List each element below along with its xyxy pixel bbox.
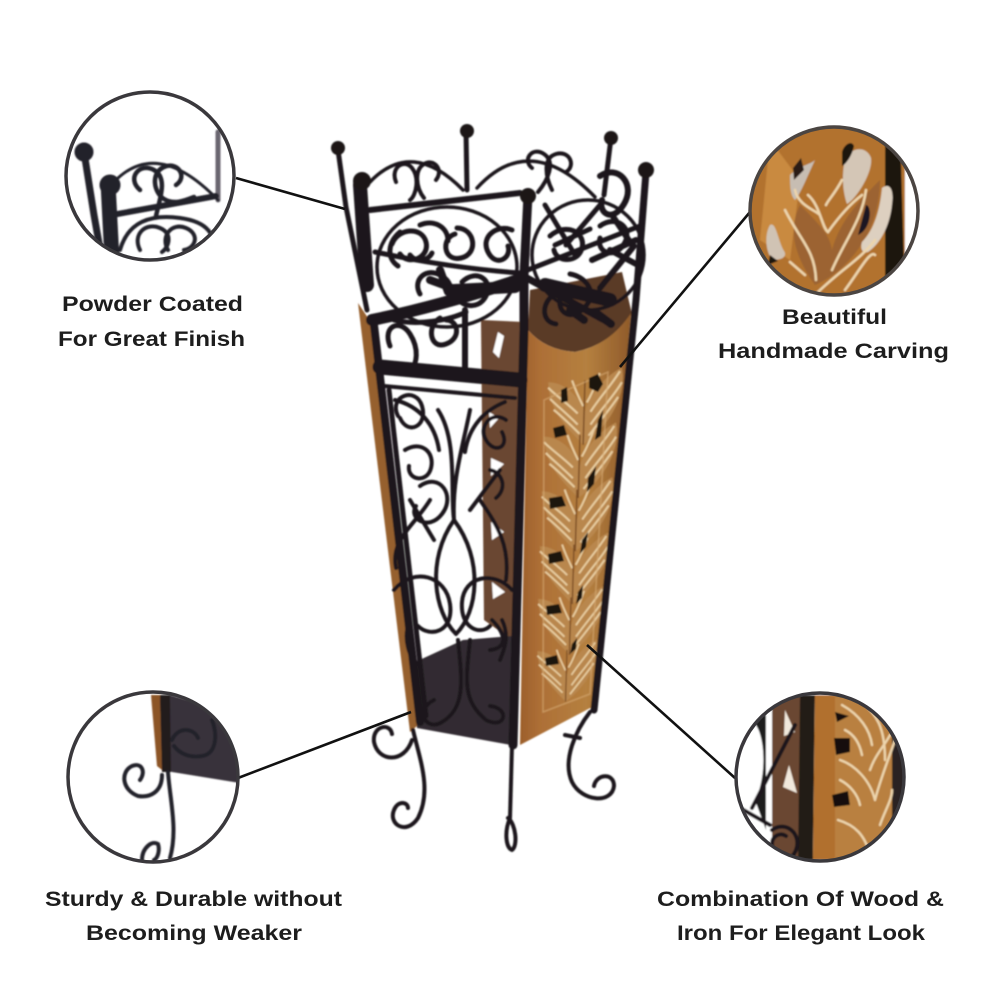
callout top-left: iron scroll detail <box>66 92 234 260</box>
label: handmade carving: Handmade Carving <box>718 340 949 363</box>
back panel cut-outs <box>489 332 505 599</box>
label: wood and iron: Combination Of Wood & <box>657 888 944 911</box>
label: sturdy and durable: Sturdy & Durable without <box>45 888 342 911</box>
back brown panel <box>481 320 524 640</box>
left wood side panel <box>358 303 424 732</box>
right carved wood panel <box>520 313 631 745</box>
finial balls <box>331 124 654 204</box>
corner posts <box>338 150 367 310</box>
connector lines <box>236 178 750 778</box>
label: handmade carving: Beautiful <box>782 306 887 329</box>
base plate <box>413 636 512 745</box>
iron frame <box>338 132 646 850</box>
door frame <box>380 367 520 380</box>
rim bars <box>370 193 520 210</box>
label: powder coated: Powder Coated <box>62 293 243 316</box>
feet <box>374 727 424 827</box>
callout top-right: wood carving detail <box>745 120 925 300</box>
rim rear wood glimpse <box>528 272 632 352</box>
label: powder coated: For Great Finish <box>58 328 245 351</box>
callout bottom-right: wood and iron detail <box>734 691 906 863</box>
callout bottom-left: sturdy base detail <box>68 692 240 862</box>
rim scrolls <box>395 152 571 200</box>
base scrolls <box>424 620 503 725</box>
label: sturdy and durable: Becoming Weaker <box>86 922 302 945</box>
product photo: umbrella stand <box>331 124 654 850</box>
carved leaf pattern <box>537 368 623 712</box>
rim arcs and rings <box>370 161 595 197</box>
label: wood and iron: Iron For Elegant Look <box>677 922 925 945</box>
door scrollwork <box>436 520 475 634</box>
